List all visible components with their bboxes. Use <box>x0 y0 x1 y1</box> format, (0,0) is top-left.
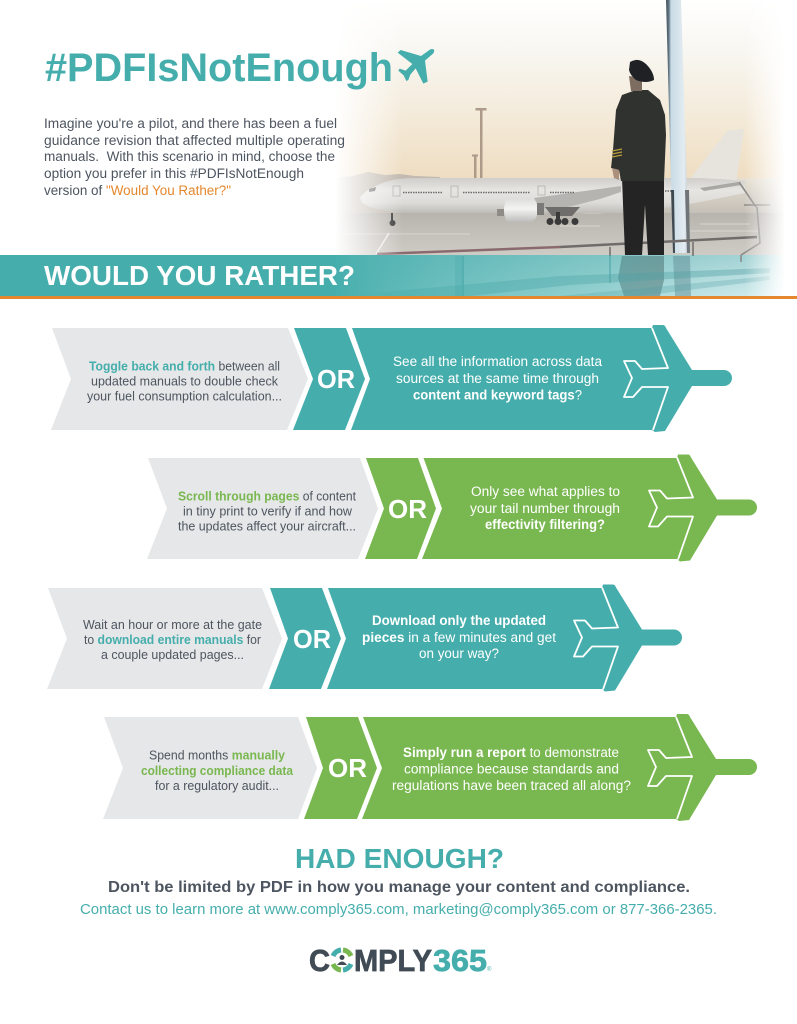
row 3 right option text: on your way? <box>419 646 499 661</box>
photo: pilot watching airplane through window <box>342 0 781 296</box>
window column <box>666 0 690 253</box>
row 1 left option text <box>87 358 282 404</box>
row 1 left option text: Toggle back and forth between all <box>89 358 280 374</box>
engine <box>504 201 537 222</box>
apron centre line <box>376 233 389 254</box>
distant treeline <box>335 172 440 213</box>
railing <box>377 237 757 256</box>
row 2 OR chevron <box>365 458 436 559</box>
floor reflections <box>398 256 770 296</box>
intro paragraph <box>44 116 345 198</box>
row 1 OR label: OR <box>317 364 355 394</box>
row 3 right option text: pieces in a few minutes and get <box>362 630 556 645</box>
row 3 left option text: a couple updated pages... <box>101 647 244 662</box>
trousers <box>622 178 664 255</box>
row 2 OR label: OR <box>388 494 427 524</box>
hand <box>612 168 619 180</box>
logo: Comply365: MPLY <box>354 943 432 978</box>
row 3 left option text: Wait an hour or more at the gate <box>83 617 262 632</box>
row 4 left option text: for a regulatory audit... <box>155 778 279 793</box>
tail fin <box>688 129 744 183</box>
row 1 right option text: See all the information across data <box>393 354 602 369</box>
orange rule <box>0 296 797 299</box>
icon: title airplane <box>398 49 434 84</box>
row 4 left option text: collecting compliance data <box>141 763 294 778</box>
fuselage <box>360 178 745 213</box>
banner band <box>0 255 797 296</box>
row 4 left option chevron <box>103 717 317 819</box>
row 3 left option text: to download entire manuals for <box>84 632 262 647</box>
row 1 left option text: your fuel consumption calculation... <box>87 388 282 404</box>
intro paragraph: option you prefer in this #PDFIsNotEnough <box>44 166 304 181</box>
row 4 right option text: regulations have been traced all along? <box>392 778 631 793</box>
intro paragraph: manuals. With this scenario in mind, choose the <box>44 149 335 164</box>
fuselage doors <box>393 186 545 197</box>
row 1: toggle vs tags <box>51 325 732 432</box>
row 4 right option text: compliance because standards and <box>404 762 619 776</box>
footer heading: HAD ENOUGH? <box>295 843 504 874</box>
row 2 right option text <box>470 484 620 532</box>
coat <box>611 90 666 181</box>
sleeve stripes <box>612 149 622 157</box>
row 3 OR label: OR <box>293 624 331 654</box>
footer statement: Don't be limited by PDF in how you manage your content and compliance. <box>108 879 690 896</box>
row 4: manual data vs report <box>103 714 757 821</box>
rear stabilizer <box>700 182 741 191</box>
row 2 left option text: in tiny print to verify if and how <box>183 504 353 518</box>
row 3 right option text: Download only the updated <box>372 613 546 628</box>
floor reflection <box>384 255 781 296</box>
logo ring icon <box>333 950 351 970</box>
row 2 right option text: Only see what applies to <box>471 484 620 499</box>
row 3 right option text <box>362 613 556 661</box>
cockpit window <box>369 187 376 192</box>
row 2 left option text: the updates affect your aircraft... <box>178 518 356 534</box>
intro paragraph: guidance revision that affected multiple operating <box>44 133 345 148</box>
row 2 right option text: effectivity filtering? <box>485 517 605 532</box>
sky <box>344 30 780 178</box>
row 2 left option text: Scroll through pages of content <box>178 488 356 504</box>
row 3: wait vs download <box>47 584 682 692</box>
row 3 left option chevron <box>47 588 282 689</box>
logo: Comply365: 365 <box>433 943 487 978</box>
far engine <box>581 213 603 214</box>
row 4 airplane option <box>362 714 757 821</box>
row 4 OR chevron <box>304 717 377 819</box>
row 2 left option chevron <box>147 458 378 559</box>
row 1 right option text: sources at the same time through <box>396 371 599 386</box>
pilot <box>611 60 666 255</box>
window lines <box>403 191 672 192</box>
row 4 right option text <box>392 745 631 793</box>
row 2 left option text <box>178 488 356 534</box>
intro paragraph: Imagine you're a pilot, and there has been a fuel <box>44 116 337 131</box>
logo: Comply365: C <box>309 943 330 978</box>
logo: Comply365: ® <box>487 966 492 973</box>
cap <box>629 60 654 82</box>
footer contact line: Contact us to learn more at www.comply365.com, marketing@comply365.com or 877-366-2365. <box>80 901 717 918</box>
row 1 right option text <box>393 354 602 402</box>
wing <box>534 186 621 209</box>
undercarriage shadow <box>545 207 580 216</box>
light poles <box>472 108 486 179</box>
row 1 left option chevron <box>51 328 308 430</box>
row 1 airplane option <box>351 325 732 432</box>
title: #PDFIsNotEnough <box>45 46 393 90</box>
head <box>629 76 642 91</box>
row 1 OR chevron <box>293 328 365 430</box>
airport chair <box>739 182 770 262</box>
row 1 right option text: content and keyword tags? <box>413 388 582 402</box>
airplane on apron <box>360 129 745 226</box>
row 4 left option text <box>141 748 294 793</box>
row 4 right option text: Simply run a report to demonstrate <box>403 745 619 760</box>
row 2: scroll vs filtering <box>147 454 757 562</box>
row 2 right option text: your tail number through <box>470 501 620 516</box>
row 3 left option text <box>83 617 262 662</box>
row 4 OR label: OR <box>328 753 367 783</box>
logo: Comply365 <box>309 943 492 978</box>
row 3 airplane option <box>327 584 682 692</box>
row 1 left option text: updated manuals to double check <box>91 374 278 388</box>
banner heading: WOULD YOU RATHER? <box>44 260 355 291</box>
intro paragraph: version of "Would You Rather?" <box>44 183 231 198</box>
hazy distant airfield <box>612 178 780 213</box>
apron markings <box>340 224 760 234</box>
landing gear <box>390 212 578 226</box>
row 2 airplane option <box>422 454 757 562</box>
row 3 OR chevron <box>269 588 341 689</box>
row 4 left option text: Spend months manually <box>149 748 286 762</box>
apron ground <box>342 213 781 255</box>
